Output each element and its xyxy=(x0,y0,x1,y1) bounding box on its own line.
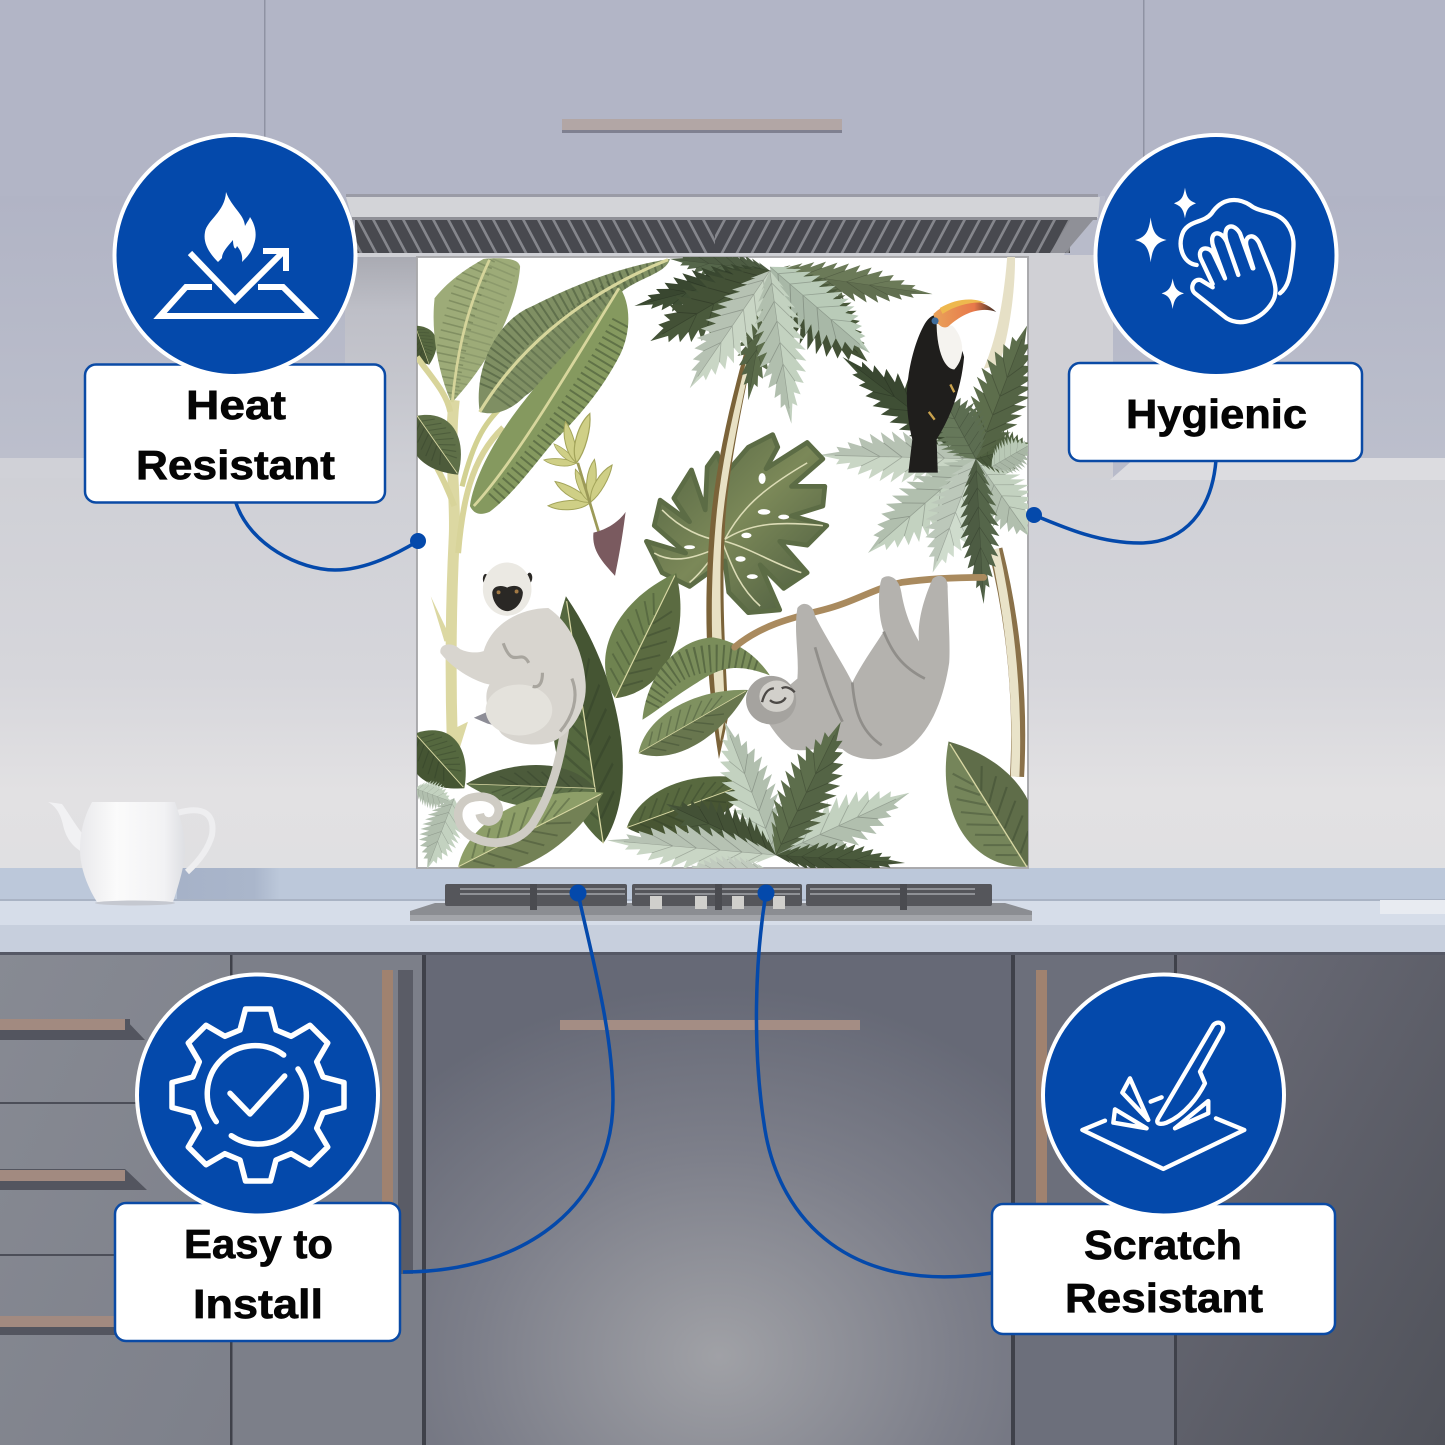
centre palm tree xyxy=(629,244,935,759)
connector: easy to install xyxy=(403,884,613,1272)
lower plant leaves xyxy=(396,559,1058,893)
label box xyxy=(115,1203,400,1341)
banana leaf C xyxy=(470,286,631,514)
teapot xyxy=(48,802,213,906)
sloth xyxy=(746,576,950,759)
toucan xyxy=(907,299,996,473)
bananas and flower xyxy=(543,412,626,576)
upper cabinet handle xyxy=(562,119,842,133)
monkey xyxy=(440,562,586,843)
icon: flame over surface xyxy=(160,192,312,316)
sloth branch xyxy=(735,577,984,647)
callout: scratch resistant xyxy=(992,972,1335,1334)
callout: easy to install xyxy=(115,972,400,1341)
curved leaf behind sloth xyxy=(642,637,770,720)
badge circle xyxy=(1041,972,1286,1218)
right palm tree xyxy=(818,257,1054,777)
banana leaf A xyxy=(434,255,520,402)
heading: easy to install: Install xyxy=(193,1281,323,1327)
icon: knife scratching surface xyxy=(1082,1023,1244,1169)
badge circle xyxy=(1094,133,1338,378)
heading: heat resistant: Resistant xyxy=(136,442,335,488)
wall behind panel xyxy=(0,255,1445,870)
label box xyxy=(85,364,385,502)
bottom palm fronds xyxy=(608,722,910,868)
callout: hygienic xyxy=(1069,133,1362,461)
cooktop hob xyxy=(410,884,1032,921)
base cabinets xyxy=(0,952,1445,1445)
heading: easy to install: Easy to xyxy=(184,1221,333,1267)
heading: scratch resistant: Scratch xyxy=(1084,1222,1242,1268)
icon: gear with check mark xyxy=(172,1009,344,1181)
cabinet handles xyxy=(0,970,1047,1335)
label box xyxy=(1069,363,1362,461)
cabinet underside lips xyxy=(0,458,1445,480)
banana tree xyxy=(398,255,670,753)
upper wall cabinets xyxy=(0,0,1445,458)
callout: heat resistant xyxy=(85,133,385,502)
panel: jungle splashback artwork xyxy=(416,256,1029,869)
icon: hand wiping with sparkles xyxy=(1135,188,1294,322)
extractor hood xyxy=(346,194,1100,257)
badge circle xyxy=(135,972,380,1218)
connector: scratch resistant xyxy=(756,884,992,1277)
heading: scratch resistant: Resistant xyxy=(1065,1275,1263,1321)
connector: hygienic xyxy=(1026,460,1216,543)
heading: hygienic: Hygienic xyxy=(1126,391,1307,437)
badge circle xyxy=(112,133,358,378)
countertop xyxy=(0,868,1445,952)
label box xyxy=(992,1204,1335,1334)
connector: heat resistant xyxy=(236,503,426,570)
heading: heat resistant: Heat xyxy=(186,382,286,428)
monstera leaf xyxy=(646,435,827,613)
banana leaf B xyxy=(479,259,670,413)
